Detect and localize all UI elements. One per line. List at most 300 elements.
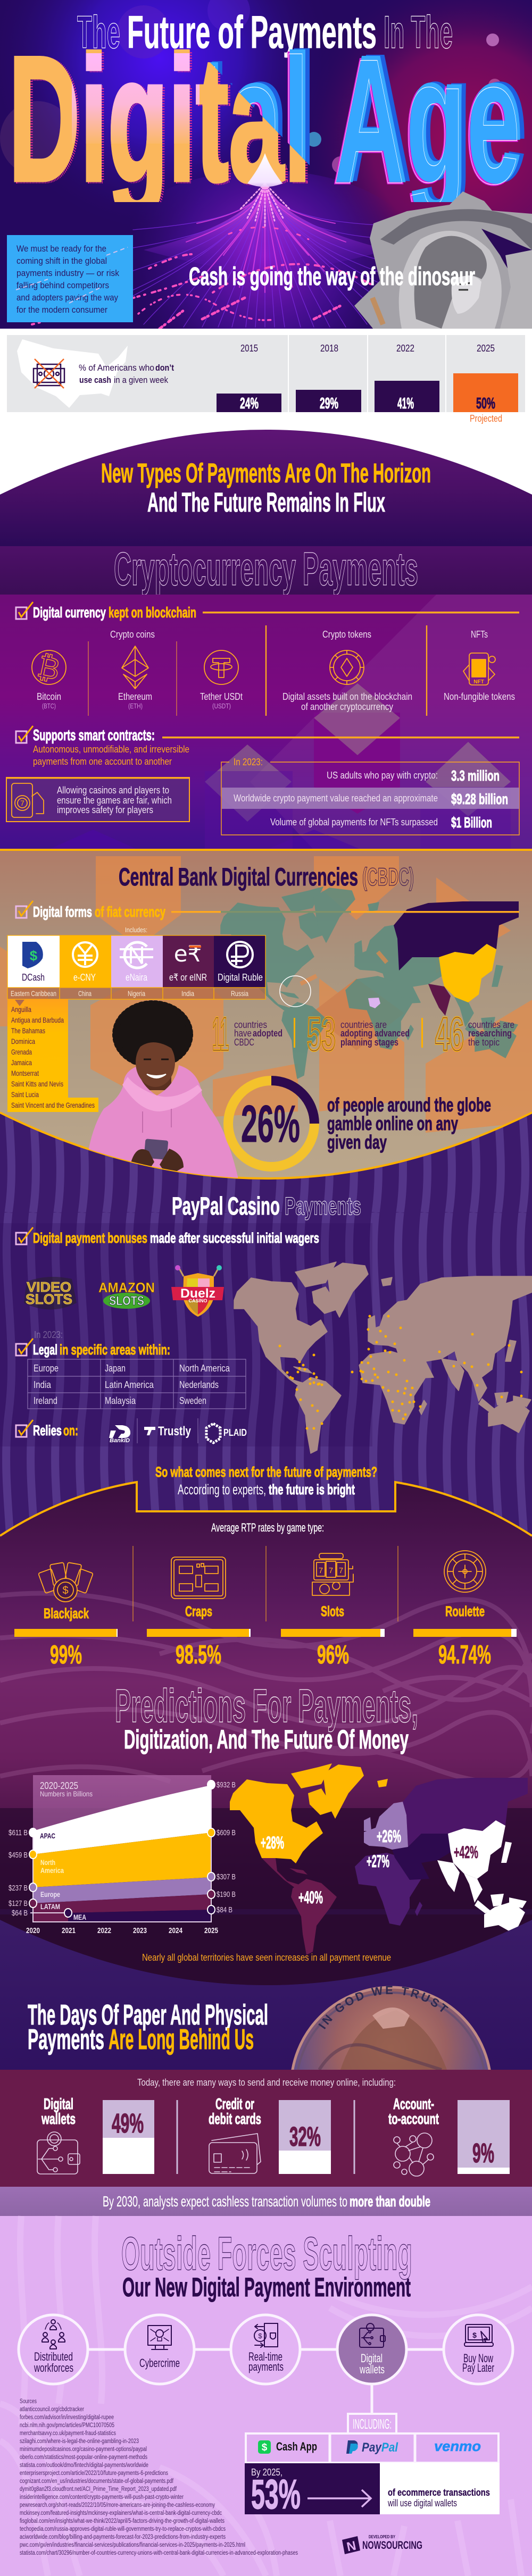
text box: intro: for the modern consumer bbox=[16, 305, 107, 315]
sources: szilaghi.com/where-is-legal-the-online-gambling-in-2023 bbox=[20, 2438, 139, 2445]
page white area bbox=[0, 329, 532, 435]
issuing regions: Russia bbox=[231, 989, 248, 998]
sources: statista.com/outlook/dmo/fintech/digital-payments/worldwide bbox=[20, 2462, 148, 2469]
sources: cognizant.com/en_us/industries/documents/state-of-global-payments.pdf bbox=[20, 2478, 174, 2485]
panel: in 2023 stats: $1 Billion bbox=[451, 814, 492, 831]
photo: person with phone bbox=[83, 1003, 240, 1189]
icon: slot machine bbox=[312, 1553, 353, 1595]
logo: digital ruble bbox=[227, 942, 253, 967]
panel: in 2023 stats: US adults who pay with crypto: bbox=[327, 770, 438, 781]
heading: digital currency: kept on blockchain bbox=[109, 604, 196, 621]
bar 2022: 2022 bbox=[396, 343, 414, 354]
sources: ncbi.nlm.nih.gov/pmc/articles/PMC10070505 bbox=[20, 2422, 114, 2429]
world map: cbdc adoption bbox=[221, 887, 519, 1078]
growth labels: +40% bbox=[298, 1888, 323, 1907]
method: account to account: to-account bbox=[388, 2111, 439, 2128]
panel: average rtp rates bbox=[14, 1521, 517, 1669]
ripple background under casino panel bbox=[0, 1106, 532, 1542]
heading: digital currency: Digital currency bbox=[33, 604, 106, 621]
method: credit or debit cards: debit cards bbox=[209, 2111, 261, 2128]
area chart: revenue by region bbox=[9, 1775, 236, 1935]
bar 2018 bbox=[296, 343, 361, 412]
including box: INCLUDING: bbox=[353, 2416, 392, 2432]
donut chart: 26 percent bbox=[228, 1081, 314, 1167]
panel: outside forces bbox=[0, 2216, 532, 2576]
icon: laptop checkout: $ bbox=[472, 2331, 477, 2339]
icon: team bbox=[42, 2320, 65, 2349]
bar 2015: 24% bbox=[240, 395, 259, 412]
text box: intro: and adopters paving the way bbox=[16, 292, 118, 303]
crypto coin labels bbox=[37, 691, 243, 710]
sources: aciworldwide.com/blog/billing-and-payments-forecast-for-2023-predictions-from-industry-experts bbox=[20, 2534, 226, 2540]
force: buy now pay later: Pay Later bbox=[462, 2361, 494, 2374]
method: credit or debit cards bbox=[209, 2096, 331, 2174]
list: eastern caribbean members: Dominica bbox=[11, 1037, 35, 1046]
rtp progress bars bbox=[14, 1629, 517, 1637]
stat: 53 countries: adopting advanced bbox=[340, 1028, 410, 1039]
world map: paypal legal areas bbox=[234, 1262, 532, 1453]
crypto category labels: Crypto coins bbox=[110, 629, 155, 640]
crypto category labels: Crypto tokens bbox=[322, 629, 371, 640]
logo: duelz casino: Duelz bbox=[180, 1286, 215, 1301]
token and nft descriptions: Non-fungible tokens bbox=[444, 691, 515, 702]
table: legal regions: Ireland bbox=[34, 1395, 57, 1406]
sources: Sources bbox=[20, 2398, 37, 2405]
table: legal regions bbox=[28, 1359, 246, 1409]
icon: nft phone bbox=[463, 653, 495, 685]
heading: digital forms of fiat currency bbox=[16, 901, 519, 920]
sources: techopedia.com/russia-approves-digital-ruble-will-governments-try-to-replace-cryptos-with-cbdcs bbox=[20, 2526, 226, 2532]
rtp values: 98.5% bbox=[176, 1641, 221, 1669]
arch heading panel bbox=[0, 430, 532, 548]
intro text: Today, there are many ways to send and receive money online, including: bbox=[137, 2077, 396, 2088]
chart region labels bbox=[40, 1831, 86, 1921]
force: cybercrime: Cybercrime bbox=[139, 2356, 180, 2370]
logo: amazon slots: SLOTS bbox=[109, 1294, 144, 1308]
heading: supports smart contracts: Supports smart contracts: bbox=[33, 727, 155, 744]
method: account to account bbox=[388, 2096, 510, 2176]
force: distributed workforces bbox=[19, 2315, 88, 2384]
icon: slot machine: 7 bbox=[319, 1566, 323, 1575]
crypto coin labels: Bitcoin bbox=[37, 691, 61, 702]
logo: video slots: VIDEO bbox=[27, 1279, 71, 1295]
arrow bbox=[307, 2490, 371, 2507]
method: digital wallets: Digital bbox=[44, 2096, 73, 2113]
stat: 46 countries bbox=[421, 1007, 514, 1060]
rtp labels: Slots bbox=[321, 1603, 344, 1619]
list: eastern caribbean members: Saint Kitts and Nevis bbox=[11, 1080, 63, 1088]
currency names bbox=[22, 972, 263, 983]
heading: relies on: on: bbox=[63, 1423, 78, 1438]
panel: in 2023 stats: Worldwide crypto payment value reached an approximate bbox=[234, 793, 438, 804]
icon: wallet bbox=[360, 2323, 385, 2347]
chart value labels: $237 B bbox=[9, 1884, 28, 1893]
list: eastern caribbean members: Grenada bbox=[11, 1048, 32, 1056]
stat: 53 countries bbox=[294, 1007, 410, 1060]
connector lines bbox=[53, 2349, 478, 2414]
heading: supports smart contracts bbox=[16, 726, 519, 767]
crypto category labels: NFTs bbox=[471, 629, 488, 640]
sources: minimumdepositcasinos.org/casino-payment-options/paypal bbox=[20, 2446, 147, 2453]
list: eastern caribbean members: Jamaica bbox=[11, 1058, 32, 1067]
logo: dcash bbox=[22, 942, 43, 968]
sources: pwc.com/gx/en/industries/financial-services/publications/financial-services-in-2025/payments-in-2025.html bbox=[20, 2542, 245, 2548]
chart value labels: $609 B bbox=[217, 1828, 236, 1837]
icon: ethereum bbox=[122, 646, 148, 689]
panel: cash usage bar chart bbox=[7, 335, 525, 424]
method: digital wallets bbox=[37, 2096, 154, 2174]
text: what comes next: According to experts, bbox=[178, 1482, 266, 1498]
panel: cryptocurrency payments bbox=[0, 595, 532, 850]
panel: in 2023 stats: In 2023: bbox=[234, 757, 263, 767]
force: real-time payments: payments bbox=[248, 2360, 284, 2373]
panel: paypal casino payments bbox=[16, 1192, 532, 1498]
logo: nowsourcing: NOWSOURCING bbox=[362, 2539, 422, 2552]
method: digital wallets: wallets bbox=[41, 2111, 76, 2128]
band: cashless volumes: By 2030, analysts expect cashless transaction volumes to bbox=[103, 2193, 347, 2210]
chart value labels: $459 B bbox=[9, 1851, 28, 1860]
crypto category labels bbox=[110, 629, 488, 640]
panel: in 2023 stats: Volume of global payments for NFTs surpassed bbox=[270, 817, 438, 827]
logo: cash app: $ bbox=[262, 2442, 268, 2453]
sources: fisglobal.com/en/insights/what-we-think/2022/april/5-factors-driving-the-growth-of-digital-wallets bbox=[20, 2518, 225, 2524]
logo: dcash: $ bbox=[30, 948, 38, 964]
token and nft descriptions: of another cryptocurrency bbox=[301, 701, 393, 712]
area chart: revenue by region: Numbers in Billions bbox=[40, 1789, 93, 1798]
force: digital wallets bbox=[337, 2315, 406, 2384]
method: account to account: Account- bbox=[393, 2096, 434, 2113]
callout: 53 percent bbox=[245, 2463, 500, 2518]
icon: credit cards bbox=[209, 2134, 261, 2173]
bar 2022: 41% bbox=[397, 395, 414, 412]
growth labels: +26% bbox=[377, 1827, 401, 1846]
heading: legal in specific areas: Legal bbox=[33, 1342, 57, 1358]
heading: digital payment bonuses: Digital payment bonuses bbox=[33, 1230, 147, 1246]
logo: e-rupee: e₹ bbox=[174, 941, 202, 967]
method: digital wallets: 49% bbox=[112, 2108, 144, 2138]
chart year axis: 2022 bbox=[97, 1926, 111, 1935]
issuing regions bbox=[11, 989, 248, 998]
heading: days of paper: Payments bbox=[28, 2023, 104, 2055]
icon: blackjack bbox=[38, 1562, 93, 1602]
sources: dymit0g8an2f3.cloudfront.net/ACI_Prime_Time_Report_2023_updated.pdf bbox=[20, 2486, 177, 2493]
icon: payment phone: $ bbox=[258, 2332, 262, 2340]
stat: 46 countries: researching bbox=[468, 1028, 512, 1039]
purple backdrop behind penny bbox=[0, 1909, 532, 2070]
faded in 2023 label: In 2023: bbox=[34, 1329, 63, 1340]
chart year axis: 2024 bbox=[169, 1926, 183, 1935]
method: account to account: 9% bbox=[472, 2138, 494, 2168]
chart value labels: $611 B bbox=[9, 1828, 28, 1837]
rtp labels: Craps bbox=[185, 1603, 212, 1619]
token and nft descriptions: Digital assets built on the blockchain bbox=[282, 691, 412, 702]
heading: digital currency bbox=[16, 602, 519, 621]
heading: days of paper bbox=[28, 1999, 268, 2055]
icon: account network bbox=[394, 2133, 434, 2176]
stat: 11 countries: have bbox=[234, 1028, 252, 1039]
chart year axis: 2025 bbox=[204, 1926, 218, 1935]
heading: days of paper: The Days Of Paper And Physical bbox=[28, 1999, 268, 2031]
logo: venmo: venmo bbox=[434, 2438, 481, 2454]
list: eastern caribbean members: The Bahamas bbox=[11, 1026, 45, 1035]
growth labels: +28% bbox=[261, 1833, 284, 1852]
force: distributed workforces: workforces bbox=[34, 2361, 73, 2374]
icon: bitcoin: ₿ bbox=[35, 649, 63, 688]
issuing regions: India bbox=[181, 989, 194, 998]
band: cashless volumes: more than double bbox=[350, 2193, 430, 2210]
logos: payment providers: Trustly bbox=[158, 1424, 192, 1438]
text: gamble online: given day bbox=[327, 1131, 387, 1153]
fiber apex glow bbox=[247, 153, 282, 187]
chart value labels: $190 B bbox=[217, 1890, 236, 1899]
callout: 53 percent: 53% bbox=[251, 2471, 301, 2518]
panel: central bank digital currencies bbox=[0, 849, 532, 1189]
panel: rtp and predictions background bbox=[0, 1482, 532, 1936]
icon: crossed money bbox=[34, 359, 64, 388]
heading: supports smart contracts: payments from one account to another bbox=[33, 756, 172, 767]
title: central bank digital currencies: (CBDC) bbox=[362, 863, 414, 891]
sources bbox=[20, 2398, 298, 2556]
chart value labels: $127 B bbox=[9, 1899, 28, 1908]
world map: revenue growth bbox=[230, 1763, 528, 1955]
panel: predictions bbox=[0, 1679, 532, 1985]
logo: cash app: Cash App bbox=[276, 2440, 317, 2453]
chart region labels: America bbox=[40, 1866, 64, 1875]
table: legal regions: Latin America bbox=[105, 1379, 154, 1390]
text: what comes next: So what comes next for the future of payments? bbox=[155, 1464, 377, 1480]
title: central bank digital currencies: Central Bank Digital Currencies bbox=[119, 863, 358, 891]
logo: nowsourcing: DEVELOPED BY bbox=[369, 2535, 396, 2539]
callout: safety for players: Allowing casinos and players to bbox=[57, 785, 169, 796]
method: credit or debit cards: 32% bbox=[289, 2121, 321, 2152]
chart title: 2020-2025 bbox=[40, 1780, 78, 1791]
table: legal regions: Sweden bbox=[179, 1395, 206, 1406]
sources: insiderintelligence.com/content/crypto-payments-will-push-past-crypto-winter bbox=[20, 2494, 184, 2500]
callout: safety for players: improves safety for players bbox=[57, 805, 153, 815]
stat: 11 countries: CBDC bbox=[234, 1037, 254, 1048]
logo: nowsourcing: N bbox=[345, 2538, 358, 2554]
stat: 53 countries: countries are bbox=[340, 1019, 387, 1030]
logo: duelz casino: CASINO bbox=[188, 1298, 207, 1303]
title: the future of payments in the: The bbox=[77, 7, 120, 58]
cash label: % of Americans who bbox=[79, 363, 154, 373]
heading: days of paper: Are Long Behind Us bbox=[109, 2023, 254, 2055]
chart region labels: North bbox=[40, 1858, 55, 1867]
stat: 53 countries: planning stages bbox=[340, 1037, 398, 1048]
text box: intro: falling behind competitors bbox=[16, 280, 109, 290]
icon: crypto token chip bbox=[330, 650, 364, 684]
logo: amazon slots bbox=[98, 1279, 155, 1309]
fiber burst graphic bbox=[132, 184, 379, 328]
rtp labels bbox=[44, 1603, 485, 1621]
icon: phone with chip: 7 bbox=[20, 799, 24, 807]
text: gamble online bbox=[327, 1094, 491, 1153]
wallet logo row bbox=[246, 2433, 498, 2463]
logo: paypal: PayPal bbox=[362, 2440, 398, 2455]
torn dollar bill bbox=[354, 191, 532, 329]
chart region labels: Europe bbox=[40, 1890, 60, 1898]
table: digital currencies bbox=[7, 935, 265, 999]
force: cybercrime bbox=[125, 2315, 194, 2384]
text box: intro: payments industry — or risk bbox=[16, 268, 119, 278]
issuing regions: Nigeria bbox=[128, 989, 145, 998]
logo: video slots: SLOTS bbox=[26, 1291, 72, 1307]
panel: in 2023 stats: 3.3 million bbox=[451, 767, 500, 784]
chart value labels: $307 B bbox=[217, 1872, 236, 1881]
logo: paypal bbox=[346, 2440, 398, 2455]
title: paypal casino payments: Payments bbox=[285, 1192, 361, 1220]
text: what comes next: the future is bright bbox=[269, 1482, 355, 1498]
panel: online payment methods bbox=[0, 2070, 532, 2187]
stat: 53 countries: 53 bbox=[307, 1007, 336, 1060]
method: credit or debit cards: Credit or bbox=[215, 2096, 254, 2113]
currency names: DCash bbox=[22, 972, 45, 983]
icon: blackjack: $ bbox=[62, 1585, 69, 1596]
bar 2025 bbox=[453, 343, 518, 424]
heading: supports smart contracts: Autonomous, unmodifiable, and irreversible bbox=[33, 744, 189, 755]
bar 2015: 2015 bbox=[240, 343, 258, 354]
force: distributed workforces: Distributed bbox=[34, 2350, 73, 2363]
bar 2018: 29% bbox=[320, 395, 338, 412]
text box: intro bbox=[7, 235, 133, 322]
hero section bbox=[0, 0, 532, 351]
chart dots bbox=[29, 1780, 215, 1917]
cash label: don’t bbox=[155, 363, 174, 373]
panel: in 2023 stats bbox=[221, 757, 519, 835]
bar 2025: 50% bbox=[476, 395, 495, 412]
currency names: e-CNY bbox=[73, 972, 96, 983]
force: real-time payments bbox=[231, 2315, 300, 2384]
sources: forbes.com/advisor/in/investing/digital-rupee bbox=[20, 2414, 114, 2421]
icon: nft phone: NFT bbox=[473, 679, 484, 685]
bar 2025: Projected bbox=[470, 413, 502, 424]
icon: roulette wheel bbox=[444, 1551, 486, 1592]
logos: payment providers: PLAID bbox=[223, 1427, 247, 1438]
bar 2022 bbox=[375, 343, 439, 412]
stat: 11 countries: countries bbox=[234, 1019, 267, 1030]
growth labels: +27% bbox=[367, 1852, 389, 1871]
crypto coin labels: (BTC) bbox=[42, 702, 56, 710]
stat: 11 countries: 11 bbox=[212, 1007, 229, 1060]
stat: 53 countries: 53 bbox=[307, 1007, 336, 1060]
including box bbox=[348, 2414, 396, 2433]
cash label: in a given week bbox=[114, 375, 168, 385]
stat: 46 countries: countries are bbox=[468, 1019, 514, 1030]
list: eastern caribbean members bbox=[7, 999, 98, 1112]
force: digital wallets: Digital bbox=[361, 2352, 383, 2365]
title: paypal casino payments: PayPal Casino bbox=[172, 1192, 280, 1220]
icon: US map bbox=[17, 339, 128, 408]
logo: amazon slots: AMAZON bbox=[98, 1279, 155, 1295]
chart value labels: $932 B bbox=[217, 1780, 236, 1789]
stat: 46 countries: the topic bbox=[468, 1037, 500, 1048]
magenta particles bbox=[32, 227, 388, 329]
title: the future of payments in the bbox=[77, 14, 452, 57]
sources: enterprisersproject.com/article/2022/10/future-payments-6-predictions bbox=[20, 2470, 168, 2477]
token and nft descriptions bbox=[282, 691, 515, 712]
sources: merchantsavvy.co.uk/payment-fraud-statistics bbox=[20, 2430, 116, 2437]
crypto coin labels: (ETH) bbox=[128, 702, 143, 710]
heading: relies on bbox=[16, 1420, 78, 1438]
text box: intro: We must be ready for the bbox=[16, 244, 106, 254]
bar 2015 bbox=[217, 343, 281, 412]
band: cashless volumes bbox=[0, 2187, 532, 2216]
donut chart: 26 percent: 26% bbox=[241, 1094, 300, 1153]
rtp labels: Blackjack bbox=[44, 1605, 89, 1621]
callout: 53 percent: of ecommerce transactions bbox=[388, 2487, 490, 2498]
logo: duelz casino bbox=[171, 1265, 224, 1317]
rtp labels: Roulette bbox=[445, 1603, 485, 1619]
currency names: Digital Ruble bbox=[218, 972, 263, 983]
heading: digital forms of fiat currency: of fiat currency bbox=[95, 904, 165, 920]
logo: cash app bbox=[258, 2440, 317, 2454]
sources: statista.com/chart/30296/number-of-countries-currency-unions-with-central-bank-digital-currencies-in-advanced-exploration-phases bbox=[20, 2550, 298, 2556]
heading: legal in specific areas: in specific areas within: bbox=[60, 1342, 170, 1358]
crypto coin labels: Tether USDt bbox=[200, 691, 243, 702]
photo: penny bbox=[291, 1986, 491, 2070]
chart value labels: $84 B bbox=[217, 1905, 232, 1914]
stat: 46 countries: 46 bbox=[435, 1007, 464, 1060]
icon: slot machine: 7 bbox=[329, 1566, 333, 1575]
icon: hacked monitor bbox=[148, 2326, 171, 2349]
stat: 11 countries: 11 bbox=[212, 1007, 229, 1060]
chart year axis: 2020 bbox=[26, 1926, 40, 1935]
sources: pewresearch.org/short-reads/2022/10/05/more-americans-are-joining-the-cashless-economy bbox=[20, 2502, 215, 2508]
rtp values: 96% bbox=[317, 1641, 349, 1669]
text: gamble online: gamble online on any bbox=[327, 1113, 458, 1134]
heading: digital forms of fiat currency: Digital forms bbox=[33, 904, 92, 920]
logo: video slots bbox=[24, 1277, 77, 1309]
sources: atlanticcouncil.org/cbdctracker bbox=[20, 2406, 84, 2413]
cash label: use cash bbox=[79, 375, 111, 385]
rtp values: 99% bbox=[50, 1641, 82, 1669]
table: legal regions: North America bbox=[179, 1363, 230, 1374]
callout: 53 percent: will use digital wallets bbox=[387, 2498, 457, 2508]
rtp values bbox=[50, 1641, 491, 1669]
logo: nowsourcing bbox=[342, 2535, 422, 2554]
growth labels bbox=[261, 1827, 478, 1907]
chart value labels: $64 B bbox=[12, 1909, 28, 1918]
icon: wallet bbox=[37, 2132, 80, 2174]
heading: legal in specific areas bbox=[16, 1339, 170, 1358]
chart region labels: APAC bbox=[40, 1831, 55, 1840]
chart year axis bbox=[26, 1926, 218, 1935]
icon: craps table bbox=[171, 1557, 226, 1599]
table: legal regions: Malaysia bbox=[105, 1395, 136, 1406]
chart region labels: MEA bbox=[73, 1913, 86, 1921]
force: buy now pay later bbox=[444, 2315, 513, 2384]
issuing regions: China bbox=[78, 989, 92, 998]
table: legal regions: Nederlands bbox=[179, 1379, 219, 1390]
force: real-time payments: Real-time bbox=[248, 2350, 282, 2363]
title: the future of payments in the: In The bbox=[384, 7, 453, 58]
rtp values: 94.74% bbox=[438, 1641, 491, 1669]
bar 2018: 2018 bbox=[320, 343, 338, 354]
logo: e-cny bbox=[73, 942, 97, 967]
logo: enaira bbox=[120, 942, 153, 968]
includes label: Includes: bbox=[125, 926, 147, 934]
stat: 46 countries: 46 bbox=[435, 1007, 464, 1060]
list: eastern caribbean members: Saint Lucia bbox=[11, 1090, 39, 1099]
chart value labels bbox=[9, 1780, 236, 1918]
callout: 53 percent: By 2025, bbox=[251, 2467, 282, 2478]
list: eastern caribbean members: Anguilla bbox=[11, 1005, 31, 1014]
table: legal regions: India bbox=[34, 1379, 52, 1390]
panel: days of paper bbox=[28, 1986, 491, 2070]
issuing regions: Eastern Caribbean bbox=[11, 989, 56, 998]
heading: relies on: Relies bbox=[33, 1423, 62, 1438]
chart region labels: LATAM bbox=[40, 1902, 60, 1911]
